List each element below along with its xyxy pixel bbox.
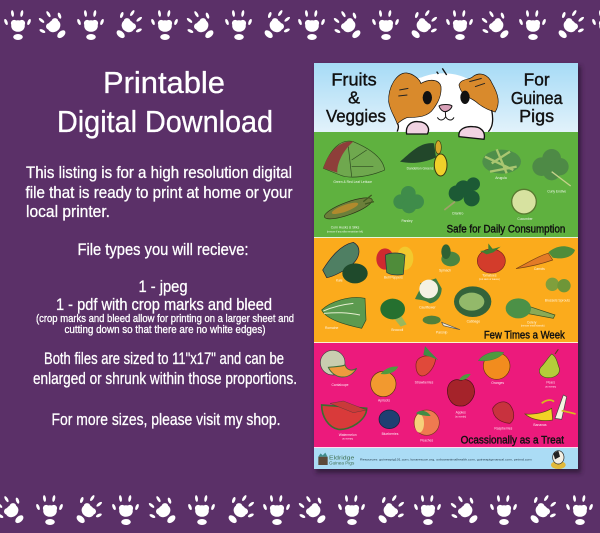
text block: file types: cutting down so that there are no white edges) [64,324,266,336]
footer sources: Resources: guineapig101.com, lunarescue.org, oxbowanimalhealth.com, guineapigmanual.com, petmd.com [360,457,532,461]
icon: dandelion greens [400,141,447,176]
text block: file sizes: Both files are sized to 11"x17" and can be [44,349,284,368]
weekly items [322,242,575,341]
icon: carrot: Carrots [534,267,545,271]
icon: apple: (no seeds) [455,416,466,418]
icon: cabbage: Cabbage [467,319,480,323]
poster title left: Fruits [331,69,377,89]
bottom paw print border [0,489,594,531]
icon: celery [506,298,555,328]
icon: pear [539,349,559,389]
poster title right: Pigs [519,106,554,126]
panel: safe for daily consumption [314,132,578,237]
icon: footer logo [318,453,354,466]
icon: carrot [516,246,575,271]
icon: cilantro: Cilantro [452,211,464,215]
icon: orange: Oranges [491,381,504,385]
icon: spinach [439,244,460,273]
poster title left: & [348,87,360,107]
icon: cilantro [444,177,480,215]
icon: strawberry [415,346,438,385]
icon: curly endive [532,149,571,194]
icon: tomato: Tomatoes [482,273,497,277]
title: Digital Download [57,104,273,139]
text block: file sizes: enlarged or shrunk within those proportions. [33,369,297,388]
icon: parsnip [423,316,460,335]
panel: occasionally as a treat [314,343,578,447]
icon: bell peppers [376,247,413,280]
icon: blueberry [379,410,400,436]
icon: bell peppers: Bell Peppers [384,276,403,280]
icon: parsnip: Parsnip [436,331,447,335]
icon: parsley: Parsley [401,219,413,223]
text block: listing description: This listing is for a high resolution digital [26,163,292,182]
heading: few times a week: Few Times a Week [484,329,565,341]
icon: corn husks [322,194,374,233]
icon: footer logo: Eldridge [329,456,354,462]
icon: parsley [393,186,424,223]
icon: apple [447,374,475,418]
icon: cabbage [454,286,491,323]
text block: listing description: local printer. [26,202,110,221]
poster title right: For [524,69,550,89]
title: Printable [103,65,225,100]
icon: cucumber: Cucumber [517,217,534,221]
icon: cucumber [512,189,536,221]
icon: brussels sprouts [545,278,571,303]
poster title right [511,69,562,126]
icon: curly endive: Curly Endive [547,190,566,194]
icon: banana [525,395,576,427]
heading: occasionally as a treat: Ocassionally as a Treat [461,434,564,446]
text block: listing description: file that is ready to print at home or your [26,183,293,202]
icon: celery: (remove small strands) [521,325,545,328]
heading: safe for daily consumption: Safe for Daily Consumption [447,223,565,235]
icon: strawberry: Strawberries [415,381,434,385]
icon: broccoli [380,299,407,332]
poster title left: Veggies [326,106,386,126]
text block: file types: (crop marks and bleed allow for printing on a larger sheet and [36,313,294,325]
poster title right: Guinea [511,88,562,108]
icon: corn husks: (remove if any silks remain/are left) [327,230,363,233]
icon: cantaloupe [320,350,357,387]
treat items [318,346,576,469]
panel: few times a week [314,238,578,342]
header and daily items [322,68,571,235]
top paw print border [3,4,600,46]
icon: lettuce: Green & Red Leaf Lettuce [333,180,372,184]
text block: file types: 1 - jpeg [138,277,188,296]
icon: lettuce [323,141,385,184]
icon: romaine [322,297,366,330]
icon: arugula [482,149,521,180]
icon: dandelion greens: Dandelion Greens [407,166,434,170]
poster [314,63,581,473]
icon: apricot: Apricots [378,398,390,402]
icon: watermelon: (no seeds) [342,439,353,441]
icon: pear: Pears [546,381,555,385]
icon: spinach: Spinach [439,269,451,273]
icon: tomato [477,243,505,281]
icon: watermelon [322,401,367,441]
icon: arugula: Arugula [495,176,507,180]
icon: footer mascot [551,451,566,469]
icon: raspberry [493,402,514,431]
icon: brussels sprouts: Brussels Sprouts [545,299,570,303]
icon: cauliflower: Cauliflower [419,305,436,309]
icon: blueberry: Blueberries [382,432,399,436]
icon: tomato: (not stem or leaves) [479,278,500,281]
icon: pear: (no seeds) [545,387,556,389]
icon: peach: Peaches [420,438,433,442]
text block: file sizes [33,349,297,388]
panel: poster footer [314,448,578,469]
icon: broccoli: Broccoli [391,328,404,332]
icon: cauliflower [415,278,442,309]
title [57,65,273,139]
text block: more sizes: For more sizes, please visit my shop. [52,410,280,429]
icon: raspberry: Raspberries [494,427,513,431]
icon: cantaloupe: Cantaloupe [331,383,349,387]
icon: peach [414,410,439,442]
text block: file types: 1 - pdf with crop marks and bleed [56,295,272,314]
panel: poster header [314,63,578,132]
poster title left [326,69,386,126]
icon: apple: Apples [456,411,466,415]
text block: listing description [26,163,293,221]
icon: celery: Celery [527,320,537,324]
icon: guinea pig [389,68,498,139]
icon: romaine: Romaine [325,326,338,330]
text block: file types [36,240,294,336]
icon: banana: Bananas [533,423,547,427]
icon: kale [323,242,368,283]
icon: corn husks: Corn Husks & Silks [331,226,360,230]
icon: footer logo: Guinea Pigs [329,461,354,466]
icon: orange [478,352,510,385]
icon: apricot [371,367,398,402]
icon: watermelon: Watermelon [339,433,357,437]
icon: kale: Kale [336,279,343,283]
text block: file types: File types you will recieve: [78,240,248,259]
